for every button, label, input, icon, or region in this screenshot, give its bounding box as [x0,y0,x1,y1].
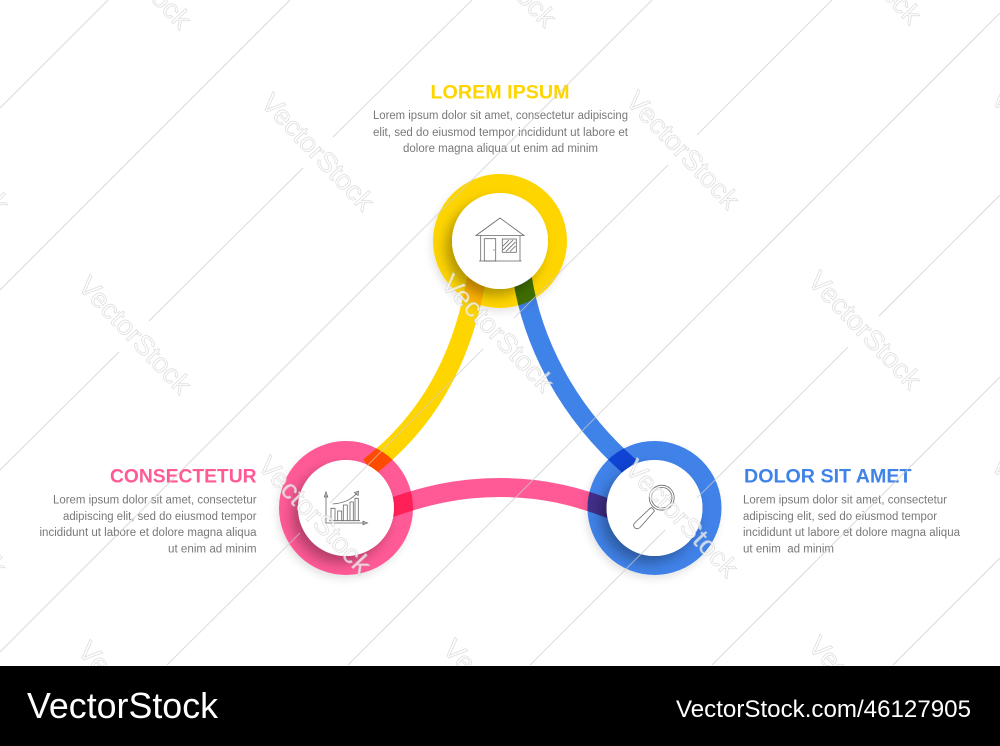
text block: left: ut enim ad minim [168,544,256,556]
footer brand: VectorStock [27,685,219,726]
watermark text: VectorStock [620,85,746,215]
text block: right: incididunt ut labore et dolore magna aliqua [743,527,961,539]
connector: pink [385,488,615,511]
heading: lorem ipsum: LOREM IPSUM [430,82,570,104]
icon: bar chart [324,491,368,525]
icon: house [476,218,524,261]
footer bar [0,666,1000,746]
footer url: VectorStock.com/46127905 [676,696,971,723]
text block: right: Lorem ipsum dolor sit amet, consectetur [743,494,947,506]
hub: pink centre [298,460,394,556]
heading: consectetur: CONSECTETUR [110,466,257,488]
hub: blue centre [606,460,702,556]
heading: dolor sit amet: DOLOR SIT AMET [744,466,912,488]
text block: left: Lorem ipsum dolor sit amet, consectetur [53,494,257,506]
watermark text: VectorStock [435,268,561,398]
ring: yellow [442,184,558,298]
watermark text: VectorStock [802,265,928,395]
connector: yellow [369,276,477,467]
text block: left: adipiscing elit, sed do eiusmod tempor [63,511,257,523]
text block: top: Lorem ipsum dolor sit amet, consectetur adipiscing [373,110,628,122]
text block: right: adipiscing elit, sed do eiusmod tempor [743,511,937,523]
ring: blue [597,450,712,566]
text block: right [743,494,961,556]
watermark text: VectorStock [252,450,378,580]
text block: right: ut enim ad minim [743,544,834,556]
icon: magnifier [634,485,674,529]
watermark text: VectorStock [619,453,745,583]
watermark text: VectorStock [72,270,198,400]
ring: pink [288,450,404,566]
text block: top: elit, sed do eiusmod tempor incididunt ut labore et [373,127,629,139]
text block: top: dolore magna aliqua ut enim ad minim [403,143,598,155]
text block: left [40,494,257,556]
watermark text: VectorStock [255,87,381,217]
text block: left: incididunt ut labore et dolore magna aliqua [40,527,257,539]
connector: blue [522,276,630,467]
hub: yellow centre [452,193,548,289]
panel: triangle diagram [288,184,712,566]
text block: top [373,110,629,155]
